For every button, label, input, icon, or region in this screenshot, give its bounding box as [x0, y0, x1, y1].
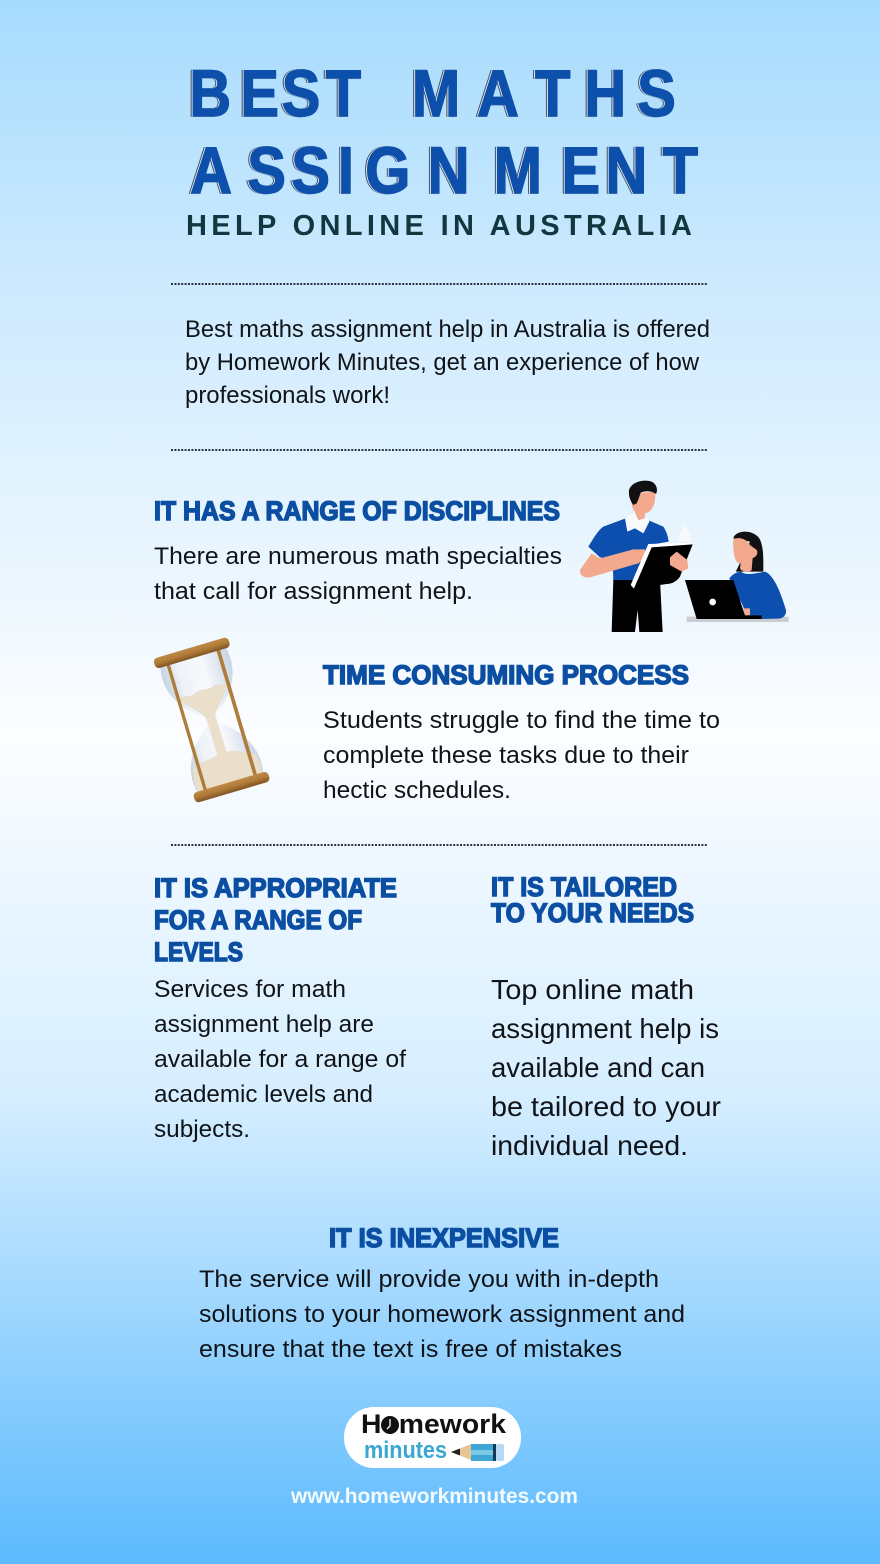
panel: time consuming process	[323, 660, 720, 804]
panel: inexpensive: ensure that the text is free of mistakes	[199, 1336, 622, 1363]
panel: inexpensive	[199, 1223, 685, 1363]
title	[186, 58, 698, 242]
panel: disciplines	[154, 496, 562, 605]
panel: disciplines: IT HAS A RANGE OF DISCIPLINES	[154, 496, 560, 526]
panel: disciplines: There are numerous math specialties	[154, 543, 562, 570]
panel: tailored to your needs: available and can	[491, 1052, 705, 1083]
panel: range of levels: FOR A RANGE OF	[154, 905, 362, 935]
panel: time consuming process: Students struggle to find the time to	[323, 707, 720, 734]
logo: Homework Minutes: minutes	[364, 1437, 447, 1464]
panel: time consuming process: TIME CONSUMING PROCESS	[323, 660, 689, 690]
panel: tailored to your needs: assignment help is	[491, 1013, 719, 1044]
icon: pencil	[451, 1444, 504, 1461]
intro text: Best maths assignment help in Australia is offered	[185, 316, 710, 343]
panel: tailored to your needs: be tailored to your	[491, 1091, 721, 1122]
panel: tailored to your needs: TO YOUR NEEDS	[491, 898, 694, 928]
panel: disciplines: that call for assignment help.	[154, 578, 473, 605]
illustration: man and woman working	[580, 481, 789, 632]
title: ASSIGNMENT	[190, 135, 698, 208]
website url: www.homeworkminutes.com	[290, 1485, 578, 1508]
panel: range of levels: Services for math	[154, 976, 346, 1003]
panel: range of levels: LEVELS	[154, 937, 243, 967]
icon: hourglass	[153, 637, 270, 803]
panel: inexpensive: The service will provide you with in-depth	[199, 1266, 659, 1293]
panel: inexpensive: IT IS INEXPENSIVE	[329, 1223, 559, 1253]
intro text	[185, 316, 710, 409]
panel: range of levels: academic levels and	[154, 1081, 373, 1108]
panel: range of levels	[154, 873, 406, 1143]
panel: inexpensive: solutions to your homework assignment and	[199, 1301, 685, 1328]
panel: tailored to your needs: Top online math	[491, 974, 694, 1005]
panel: range of levels: IT IS APPROPRIATE	[154, 873, 397, 903]
panel: time consuming process: hectic schedules.	[323, 777, 511, 804]
panel: range of levels: available for a range of	[154, 1046, 406, 1073]
icon: clock	[381, 1416, 399, 1434]
title: BEST MATHS	[189, 58, 676, 131]
logo: Homework Minutes	[344, 1407, 521, 1468]
title: HELP ONLINE IN AUSTRALIA	[186, 210, 692, 242]
panel: range of levels: assignment help are	[154, 1011, 374, 1038]
intro text: by Homework Minutes, get an experience of how	[185, 349, 700, 376]
panel: tailored to your needs: IT IS TAILORED	[491, 872, 677, 902]
panel: time consuming process: complete these tasks due to their	[323, 742, 689, 769]
intro text: professionals work!	[185, 382, 390, 409]
logo: Homework Minutes: Homework	[361, 1409, 507, 1439]
panel: range of levels: subjects.	[154, 1116, 250, 1143]
panel: tailored to your needs	[491, 872, 721, 1161]
panel: tailored to your needs: individual need.	[491, 1130, 688, 1161]
